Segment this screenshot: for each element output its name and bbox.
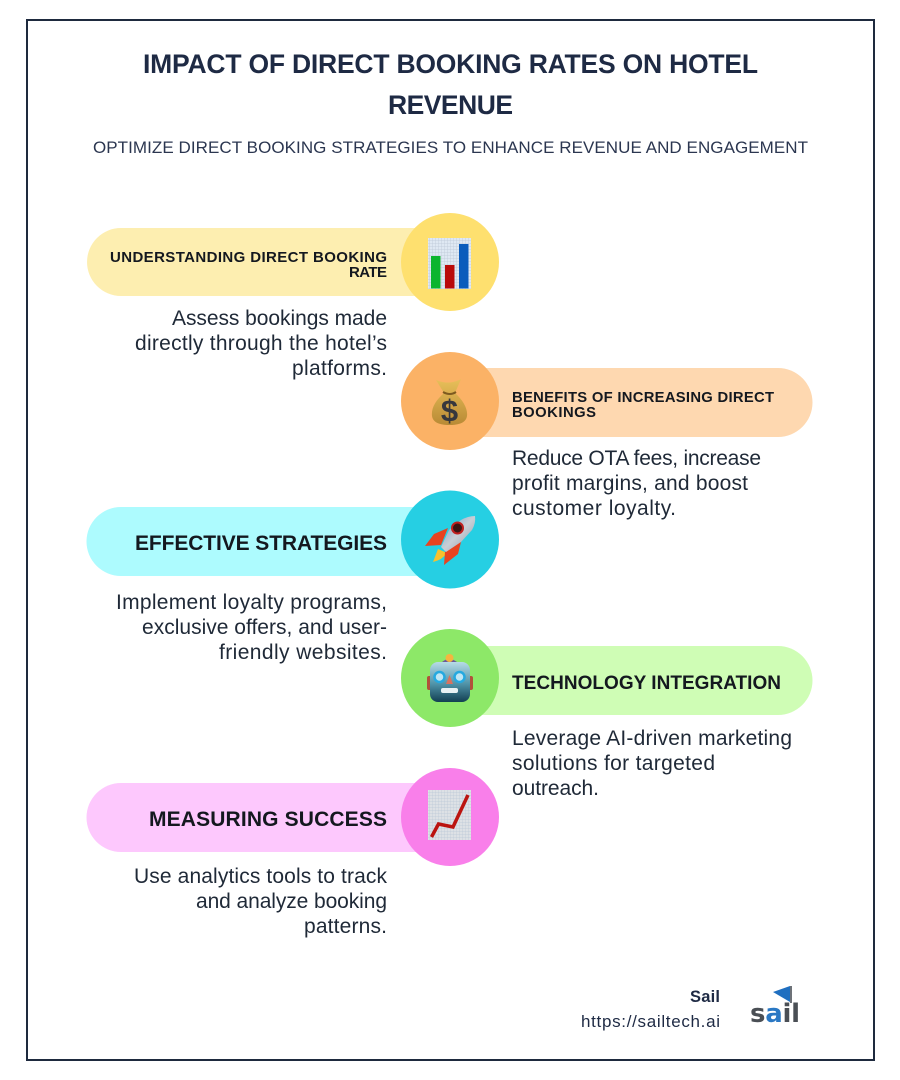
description: effective: friendly websites. (219, 641, 387, 664)
description: effective: Implement loyalty programs, (116, 591, 387, 614)
description: understanding: directly through the hotel’s (135, 332, 387, 355)
pill: benefits (460, 368, 813, 437)
title (143, 49, 758, 120)
description: understanding: Assess bookings made (172, 307, 387, 330)
circle: pink (401, 768, 499, 866)
description: measuring: and analyze booking (196, 890, 387, 913)
circle: yellow (401, 213, 499, 311)
description: benefits: customer loyalty. (512, 497, 676, 520)
icon: rising chart (428, 790, 471, 840)
icon: bar chart (428, 238, 471, 289)
description: technology (512, 727, 792, 800)
icon: money bag (432, 379, 467, 428)
description: technology: outreach. (512, 777, 599, 800)
heading: benefits: BOOKINGS (512, 405, 596, 421)
description: benefits: profit margins, and boost (512, 472, 748, 495)
heading: effective: EFFECTIVE STRATEGIES (135, 532, 387, 555)
pill: understanding (87, 228, 440, 296)
pill: measuring (87, 783, 440, 852)
heading: benefits: BENEFITS OF INCREASING DIRECT (512, 390, 774, 406)
heading: benefits (512, 390, 774, 421)
description: measuring: Use analytics tools to track (134, 865, 388, 888)
footer: brand name: Sail (690, 988, 720, 1006)
description: measuring: patterns. (304, 915, 387, 938)
panel: measuring success (87, 768, 499, 938)
panel: understanding direct booking rate (87, 213, 499, 380)
circle: cyan (401, 490, 499, 588)
icon: robot (427, 654, 473, 702)
description: benefits: Reduce OTA fees, increase (512, 447, 761, 470)
description: benefits (512, 447, 761, 520)
heading: measuring: MEASURING SUCCESS (149, 808, 387, 831)
circle: green (401, 629, 499, 727)
pill: effective (87, 507, 440, 576)
description: measuring (134, 865, 388, 938)
title: REVENUE (388, 90, 513, 120)
description: technology: solutions for targeted (512, 752, 715, 775)
panel: technology integration (401, 629, 813, 800)
circle: orange (401, 352, 499, 450)
heading: understanding: UNDERSTANDING DIRECT BOOKING (110, 249, 387, 266)
heading: understanding: RATE (349, 264, 387, 281)
description: understanding (135, 307, 387, 380)
pill: technology (460, 646, 813, 715)
heading: technology: TECHNOLOGY INTEGRATION (512, 673, 781, 694)
description: understanding: platforms. (292, 357, 387, 380)
heading: understanding (110, 249, 387, 281)
subtitle: OPTIMIZE DIRECT BOOKING STRATEGIES TO ENHANCE REVENUE AND ENGAGEMENT (93, 138, 808, 157)
logo: sail (750, 986, 800, 1029)
title: IMPACT OF DIRECT BOOKING RATES ON HOTEL (143, 49, 758, 79)
icon: rocket (425, 516, 475, 565)
footer: url: https://sailtech.ai (581, 1012, 720, 1031)
panel: effective strategies (87, 490, 499, 664)
icon: money bag: $ (441, 393, 458, 428)
description: effective: exclusive offers, and user- (142, 616, 387, 639)
description: technology: Leverage AI-driven marketing (512, 727, 792, 750)
logo: sail: sail (750, 999, 800, 1029)
panel: benefits of increasing direct bookings (401, 352, 813, 520)
description: effective (116, 591, 387, 664)
